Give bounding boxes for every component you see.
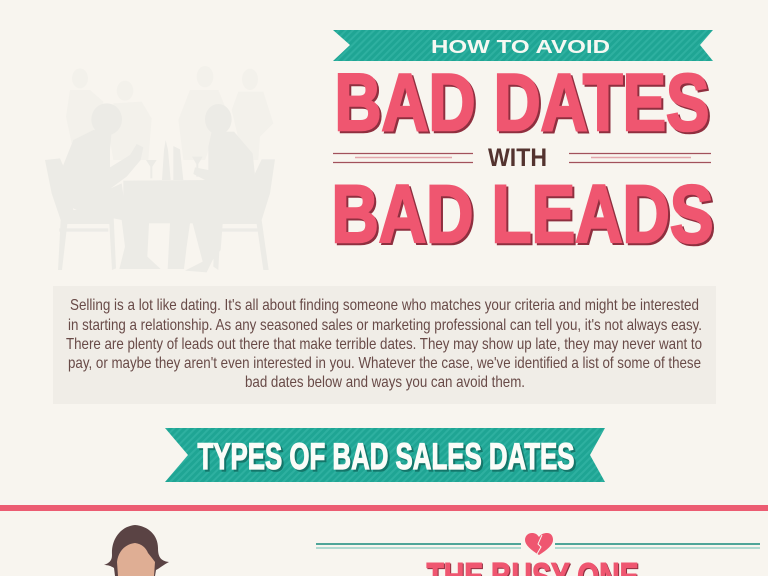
banner: types of bad sales dates — [165, 428, 605, 482]
front diners, table and chairs — [45, 103, 275, 272]
intro text: bad dates below and ways you can avoid them. — [245, 374, 525, 391]
character: busy one portrait — [104, 525, 169, 576]
face — [117, 543, 155, 576]
hair — [104, 525, 169, 576]
section divider: red bar — [0, 505, 768, 511]
with divider: WITH — [488, 144, 547, 172]
background guests silhouettes — [66, 66, 273, 160]
with divider — [333, 144, 711, 172]
icon: broken heart — [525, 533, 553, 555]
heading ornament: lines and broken heart — [316, 533, 760, 555]
illustration: couple dining silhouette — [45, 66, 275, 272]
intro text — [66, 297, 702, 391]
banner: how to avoid: HOW TO AVOID — [431, 37, 610, 57]
intro panel — [53, 286, 716, 404]
banner: types of bad sales dates: TYPES OF BAD SALES DATES — [198, 436, 574, 477]
banner: how to avoid — [333, 30, 713, 61]
